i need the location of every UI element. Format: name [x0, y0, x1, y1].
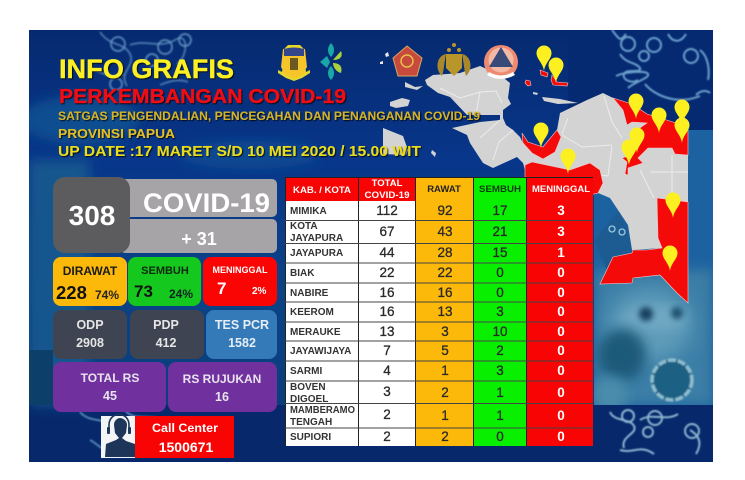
card: dirawat: 74% — [95, 288, 119, 302]
row: Merauke: 0 — [557, 324, 565, 339]
card: sembuh — [128, 257, 201, 306]
row: Boven Digoel: DIGOEL — [290, 394, 328, 405]
decorative virus strokes — [80, 30, 710, 456]
row: Keerom: 3 — [496, 304, 504, 319]
card: meninggal: MENINGGAL — [212, 265, 268, 275]
row: Mamberamo Tengah: 1 — [496, 408, 504, 423]
card: PDP: 412 — [156, 336, 176, 350]
logo: Papua province shield — [278, 45, 310, 81]
row: Kota Jayapura: 43 — [437, 224, 453, 239]
card: sembuh: 73 — [134, 282, 153, 301]
icon: call center agent — [101, 414, 135, 458]
row: Keerom: KEEROM — [290, 307, 334, 318]
card: dirawat — [53, 257, 127, 306]
card: PDP — [130, 310, 204, 359]
row: Merauke: 13 — [379, 324, 395, 339]
row: Mimika: 3 — [557, 203, 565, 218]
card: ODP: ODP — [76, 318, 104, 332]
card: sembuh: 24% — [169, 287, 193, 301]
row: Jayawijaya — [290, 343, 565, 358]
row: Jayawijaya: JAYAWIJAYA — [290, 346, 351, 357]
region: Sarmi, Jayapura, Keerom, Mamberamo Tengah, Jayawijaya — [613, 98, 688, 175]
row: Sarmi: SARMI — [290, 366, 322, 377]
map: bird's head and main body — [425, 66, 688, 250]
panel: summary statistics — [53, 177, 277, 412]
row: Mimika: MIMIKA — [290, 206, 327, 217]
row: Biak: 0 — [496, 265, 504, 280]
row: Kota Jayapura: JAYAPURA — [290, 233, 343, 244]
table header: KAB. / KOTA — [293, 185, 351, 196]
table header: TOTAL — [372, 178, 403, 189]
map: red districts — [522, 70, 688, 303]
row: Jayawijaya: 7 — [383, 343, 391, 358]
table header: SEMBUH — [479, 184, 521, 194]
row: Biak: BIAK — [290, 268, 315, 279]
logo: TNI pentagon — [393, 46, 422, 76]
call center number — [135, 416, 234, 458]
table header: COVID-19 — [364, 190, 410, 200]
row: Sarmi: 0 — [557, 363, 565, 378]
row: Jayawijaya: 5 — [441, 343, 449, 358]
row: Boven Digoel: 3 — [383, 384, 391, 399]
row: Supiori: 2 — [383, 429, 391, 444]
card: meninggal — [203, 257, 277, 306]
total cases number: 308 — [69, 200, 115, 231]
row: Supiori: 2 — [441, 429, 449, 444]
call center — [101, 414, 234, 458]
row: Merauke: 10 — [492, 324, 508, 339]
row: Boven Digoel — [290, 382, 565, 405]
table: cases by district — [285, 177, 593, 446]
region: Mimika — [525, 162, 603, 195]
total cases card: COVID-19 label — [120, 179, 277, 218]
card: total RS: TOTAL RS — [81, 371, 139, 385]
row: Jayapura: JAYAPURA — [290, 248, 343, 259]
row: Nabire: 16 — [437, 285, 453, 300]
row: Supiori: 0 — [496, 429, 504, 444]
row: Supiori: 0 — [557, 429, 565, 444]
card: total RS: 45 — [103, 389, 117, 403]
row: Keerom: 16 — [379, 304, 395, 319]
row: Boven Digoel: 1 — [496, 385, 504, 400]
row: Jayapura: 1 — [557, 245, 565, 260]
row: Kota Jayapura: 67 — [379, 224, 395, 239]
row: Mamberamo Tengah — [290, 405, 565, 428]
card: total RS — [53, 362, 166, 412]
row: Jayapura: 44 — [379, 245, 395, 260]
logo: Kementerian Kesehatan — [320, 43, 342, 80]
row: Boven Digoel: BOVEN — [290, 382, 326, 393]
row: Jayapura: 28 — [437, 245, 453, 260]
task force line: SATGAS PENGENDALIAN, PENCEGAHAN DAN PENANGANAN COVID-19 — [58, 109, 480, 123]
logos row — [278, 43, 518, 81]
row: Jayapura: 15 — [492, 245, 508, 260]
call center number: Call Center — [152, 421, 218, 435]
call center number: 1500671 — [159, 439, 213, 455]
new cases card — [120, 219, 277, 253]
row: Sarmi: 4 — [383, 363, 391, 378]
row: Sarmi: 1 — [441, 363, 449, 378]
table header — [293, 178, 591, 200]
row: Keerom — [290, 304, 565, 319]
row: Jayawijaya: 0 — [557, 343, 565, 358]
row: Biak: 22 — [379, 265, 395, 280]
row: Jayapura — [290, 245, 565, 260]
row: Mimika — [290, 203, 565, 218]
map: small islands — [380, 52, 578, 157]
card: ODP: 2908 — [76, 336, 104, 350]
card: ODP — [53, 310, 127, 359]
row: Nabire: 16 — [379, 285, 395, 300]
region: Boven Digoel and Merauke — [600, 198, 688, 303]
title: INFO GRAFIS: INFO GRAFIS — [59, 54, 234, 84]
table column fills — [285, 177, 593, 446]
row: Merauke: 3 — [441, 324, 449, 339]
row: Biak — [290, 265, 565, 280]
total cases number — [53, 177, 130, 253]
row: Keerom: 13 — [437, 304, 453, 319]
province line: PROVINSI PAPUA — [58, 127, 175, 141]
card: meninggal: 7 — [217, 279, 226, 298]
row: Nabire: NABIRE — [290, 288, 329, 299]
subtitle: PERKEMBANGAN COVID-19: PERKEMBANGAN COVID-19 — [59, 85, 346, 108]
card: PDP: PDP — [153, 318, 179, 332]
total cases card: COVID-19 label: COVID-19 — [143, 188, 270, 218]
card: RS rujukan: 16 — [215, 390, 229, 404]
row: Supiori: SUPIORI — [290, 432, 331, 443]
logo: Polri badge — [437, 43, 471, 76]
row: Mamberamo Tengah: MAMBERAMO — [290, 405, 355, 416]
row: Mamberamo Tengah: 1 — [441, 408, 449, 423]
row: Supiori — [290, 429, 565, 444]
map: region borders — [440, 88, 688, 200]
row: Sarmi: 3 — [496, 363, 504, 378]
update date line: UP DATE :17 MARET S/D 10 MEI 2020 / 15.00 WIT — [58, 144, 421, 160]
row: Biak: 0 — [557, 265, 565, 280]
table row lines — [285, 220, 593, 428]
region: Biak and Supiori — [525, 70, 568, 86]
row: Mamberamo Tengah: 2 — [383, 407, 391, 422]
row: Kota Jayapura: KOTA — [290, 221, 318, 232]
row: Keerom: 0 — [557, 304, 565, 319]
row: Merauke: MERAUKE — [290, 327, 341, 338]
row: Jayawijaya: 2 — [496, 343, 504, 358]
title block — [58, 54, 480, 160]
map: location pins — [534, 46, 690, 271]
row: Sarmi — [290, 363, 565, 378]
card: RS rujukan — [168, 362, 277, 412]
card: RS rujukan: RS RUJUKAN — [183, 372, 261, 386]
card: meninggal: 2% — [252, 286, 267, 297]
card: sembuh: SEMBUH — [141, 265, 189, 277]
row: Mimika: 17 — [492, 203, 508, 218]
card: TES PCR: TES PCR — [215, 318, 269, 332]
row: Mamberamo Tengah: 0 — [557, 408, 565, 423]
card: TES PCR: 1582 — [228, 336, 256, 350]
region: Nabire — [522, 130, 561, 159]
table header: RAWAT — [427, 184, 461, 195]
card: dirawat: 228 — [56, 282, 87, 303]
logo: BNPB circle — [484, 45, 518, 79]
row: Boven Digoel: 2 — [441, 385, 449, 400]
row: Mamberamo Tengah: TENGAH — [290, 417, 332, 428]
row: Biak: 22 — [437, 265, 453, 280]
row: Kota Jayapura: 21 — [492, 224, 508, 239]
map of Papua and West Papua — [380, 46, 690, 303]
new cases card: + 31 — [181, 229, 217, 249]
row: Nabire: 0 — [557, 285, 565, 300]
row: Merauke — [290, 324, 565, 339]
row: Kota Jayapura — [290, 221, 565, 244]
row: Boven Digoel: 0 — [557, 385, 565, 400]
row: Mimika: 112 — [376, 203, 398, 218]
row: Nabire: 0 — [496, 285, 504, 300]
row: Kota Jayapura: 3 — [557, 224, 565, 239]
card: TES PCR — [206, 310, 277, 359]
table header: MENINGGAL — [532, 184, 591, 194]
row: Mimika: 92 — [437, 203, 453, 218]
card: dirawat: DIRAWAT — [63, 264, 118, 278]
row: Nabire — [290, 285, 565, 300]
